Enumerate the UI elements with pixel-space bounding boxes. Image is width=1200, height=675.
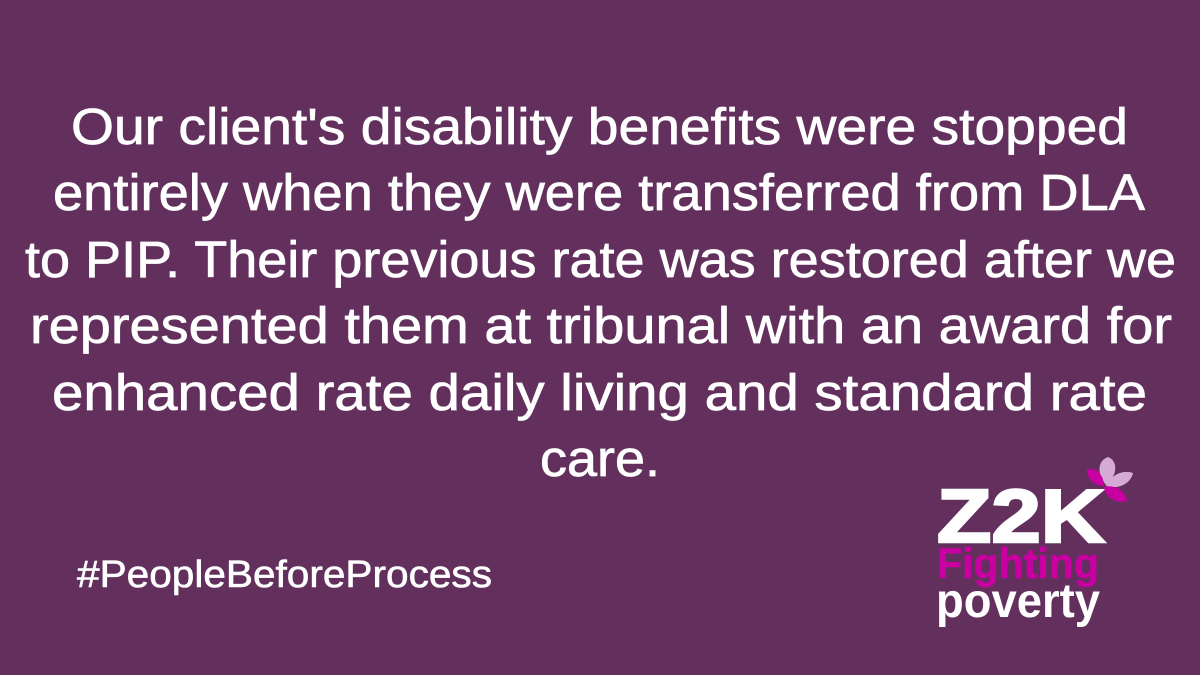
- main quote text: represented them at tribunal with an award for: [30, 297, 1172, 354]
- logo text: Fighting: Fighting: [937, 540, 1099, 588]
- main quote text: entirely when they were transferred from DLA: [53, 164, 1145, 221]
- main quote text: [25, 98, 1176, 487]
- main quote text: Our client's disability benefits were stopped: [71, 98, 1128, 155]
- Z2K logo: [936, 457, 1133, 628]
- logo icon: butterfly: [1087, 457, 1133, 502]
- main quote text: to PIP. Their previous rate was restored after we: [25, 231, 1176, 288]
- hashtag: #PeopleBeforeProcess: [77, 554, 492, 596]
- main quote text: enhanced rate daily living and standard rate: [52, 364, 1147, 421]
- main quote text: care.: [540, 430, 660, 487]
- logo wordmark: Z2K: Z2K: [937, 474, 1105, 558]
- logo text: poverty: poverty: [936, 575, 1100, 628]
